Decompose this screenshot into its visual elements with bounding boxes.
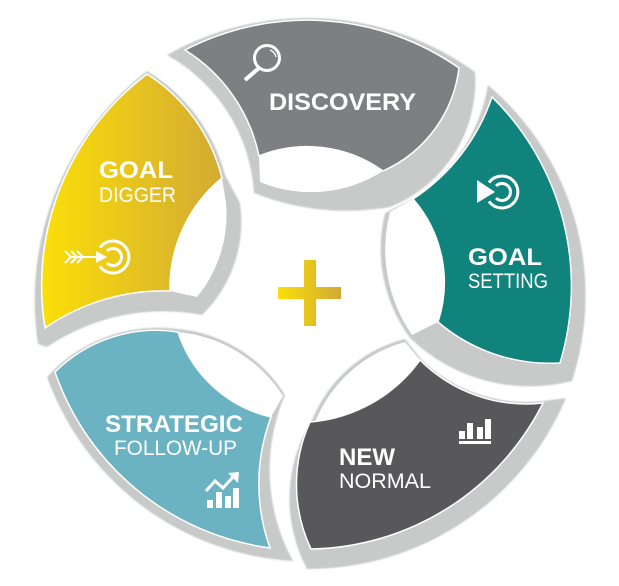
label: Goal Setting: GOAL [468, 244, 542, 271]
label: Goal Digger: GOAL [99, 157, 173, 184]
label: New Normal: NORMAL [339, 470, 431, 493]
label: Goal Setting [468, 244, 548, 293]
segment: Discovery [185, 20, 459, 171]
center plus sign [278, 260, 341, 326]
label: Goal Digger: DIGGER [99, 184, 176, 207]
segment: Strategic Follow-up [55, 330, 271, 548]
label: Strategic Follow-up: STRATEGIC [105, 411, 243, 438]
label: Strategic Follow-up [105, 411, 243, 460]
label: New Normal: NEW [339, 444, 395, 471]
label: Goal Setting: SETTING [468, 270, 548, 293]
icon: target with triangle [477, 176, 518, 208]
label: New Normal [339, 444, 431, 493]
segment: Goal Digger [42, 74, 222, 328]
label: Goal Digger [99, 157, 176, 207]
icon: growth chart [206, 472, 239, 508]
label: Strategic Follow-up: FOLLOW-UP [114, 437, 237, 460]
icon: bar chart [459, 419, 491, 444]
icon: arrow and target [65, 241, 129, 273]
inner white petals [170, 147, 444, 422]
icon: magnifying glass [245, 46, 280, 80]
segment: Goal Setting [413, 97, 571, 363]
segment: New Normal [296, 360, 543, 549]
label: Discovery: DISCOVERY [269, 89, 416, 116]
